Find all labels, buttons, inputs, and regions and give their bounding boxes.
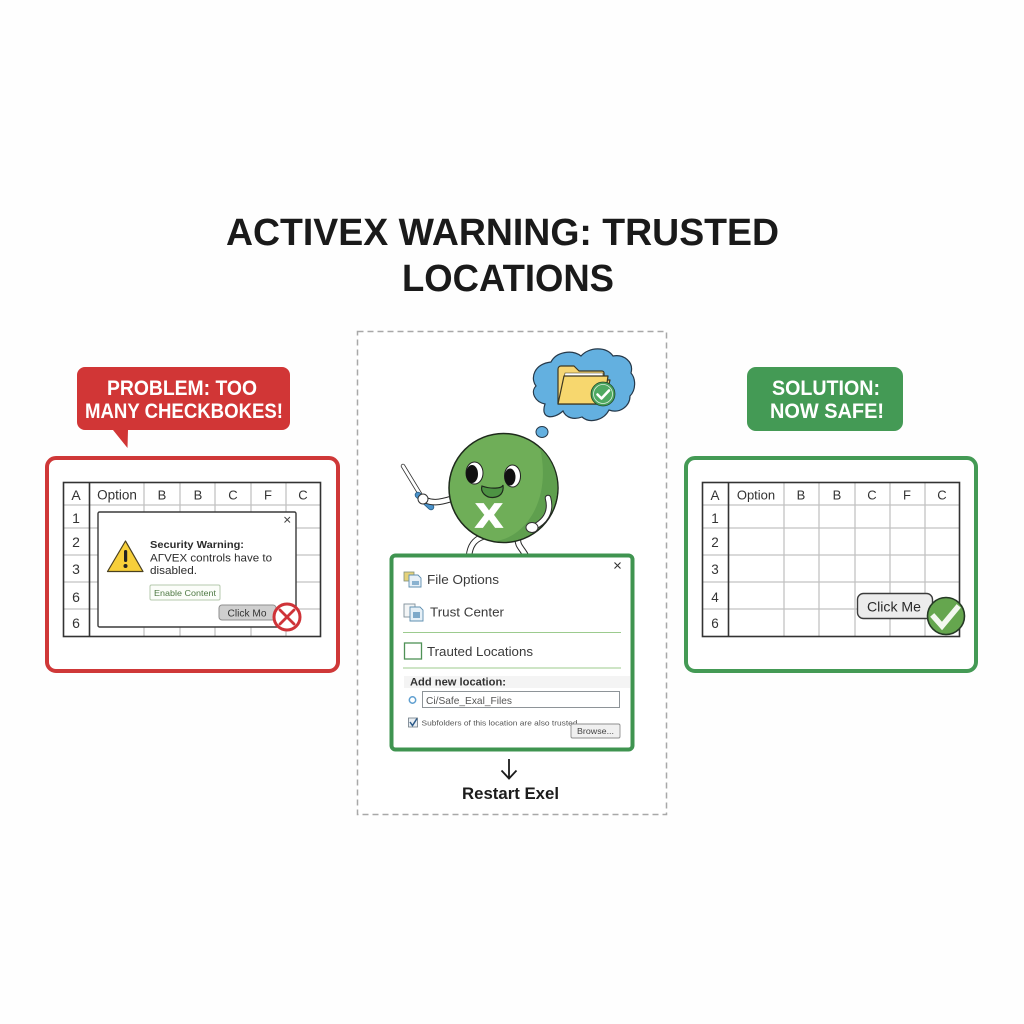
mascot mouth (482, 485, 503, 498)
spreadsheet grid: solution: 4 (711, 590, 719, 605)
spreadsheet grid: problem: B (194, 488, 202, 502)
spreadsheet grid: solution: 2 (711, 535, 719, 550)
arrow: down to restart (502, 759, 516, 778)
callout: problem: MANY CHECKBOKES! (85, 400, 283, 423)
spreadsheet grid: solution: B (797, 488, 805, 502)
spreadsheet grid: solution: Option (737, 488, 775, 502)
click me button: Click Me (867, 598, 921, 614)
trusted locations checkbox (404, 643, 422, 659)
panel: trust center dialog (392, 556, 632, 750)
spreadsheet grid: problem: C (298, 488, 308, 502)
spreadsheet grid: solution (702, 482, 960, 637)
file options label: File Options (427, 572, 500, 587)
callout: solution: SOLUTION: (772, 377, 880, 400)
icon: green check (928, 598, 964, 634)
spreadsheet grid: problem: F (264, 488, 272, 502)
close icon (284, 517, 290, 522)
warning text: disabled. (150, 565, 197, 577)
add new location row: Add new location: (410, 676, 506, 688)
panel: solution steps (dashed frame) (358, 332, 666, 814)
enable content button: Enable Content (154, 588, 217, 598)
warning text: Security Warning: (150, 539, 244, 551)
mascot right arm (534, 498, 549, 527)
mascot left arm (425, 499, 451, 502)
spreadsheet grid: problem: 6 (72, 589, 80, 605)
spreadsheet grid: solution: C (937, 488, 947, 502)
spreadsheet grid: problem: A (71, 487, 81, 503)
click me button (219, 605, 276, 620)
icon: red X (274, 604, 300, 630)
spreadsheet grid: solution: C (867, 488, 877, 502)
mascot X logo: X (476, 497, 502, 534)
security warning dialog (98, 512, 300, 630)
thought dot (536, 426, 548, 438)
spreadsheet grid: problem (63, 482, 321, 637)
browse button (571, 724, 620, 738)
callout: solution (747, 367, 903, 431)
spreadsheet grid: problem: 3 (72, 561, 80, 577)
cloud (533, 349, 635, 421)
mascot body (449, 434, 558, 542)
icon: thought cloud with folder (533, 349, 635, 438)
pointer stick (403, 466, 431, 507)
callout: problem: PROBLEM: TOO (107, 377, 257, 400)
spreadsheet grid: problem: Option (97, 488, 137, 502)
title: LOCATIONS (402, 258, 614, 300)
folder check badge (591, 382, 615, 406)
spreadsheet grid: problem: B (158, 488, 166, 502)
mascot legs (469, 537, 526, 556)
spreadsheet grid: problem: 1 (72, 510, 80, 526)
title (226, 212, 779, 300)
spreadsheet grid: problem: C (228, 488, 238, 502)
icon: warning triangle (108, 541, 143, 572)
mascot: green ball character (403, 434, 558, 556)
spreadsheet grid: solution: 3 (711, 562, 719, 577)
title: ACTIVEX WARNING: TRUSTED (226, 212, 779, 254)
panel: problem spreadsheet (47, 458, 338, 671)
browse button: Browse... (577, 726, 614, 736)
spreadsheet grid: solution: A (710, 488, 720, 503)
warning text (150, 539, 272, 577)
callout: problem (77, 367, 290, 448)
warning text: AΓVEX controls have to (150, 552, 272, 564)
trusted locations label: Trauted Locations (427, 644, 533, 659)
restart label: Restart Exel (462, 784, 559, 803)
folder (558, 366, 610, 404)
spreadsheet grid: solution: 1 (711, 511, 719, 526)
close icon (614, 562, 620, 568)
trust center label: Trust Center (430, 604, 505, 620)
mascot eyes (466, 462, 520, 487)
enable content button (150, 585, 220, 600)
path input (422, 692, 620, 708)
icon: trust center (404, 604, 423, 621)
spreadsheet grid: problem: 2 (72, 534, 80, 550)
radio button (409, 697, 416, 703)
spreadsheet grid: problem: 6 (72, 615, 80, 631)
add new location row (404, 676, 630, 688)
click me button (858, 594, 932, 618)
path input: Ci/Safe_Exal_Files (426, 695, 512, 707)
click me button: Click Mo (228, 608, 267, 620)
spreadsheet grid: solution: F (903, 488, 911, 502)
icon: file options (404, 572, 421, 587)
subfolders checkbox: Subfolders of this location are also trusted (422, 718, 578, 728)
spreadsheet grid: solution: 6 (711, 616, 719, 631)
panel: fixed spreadsheet (686, 458, 976, 671)
spreadsheet grid: solution: B (833, 488, 841, 502)
callout: solution: NOW SAFE! (770, 400, 884, 423)
